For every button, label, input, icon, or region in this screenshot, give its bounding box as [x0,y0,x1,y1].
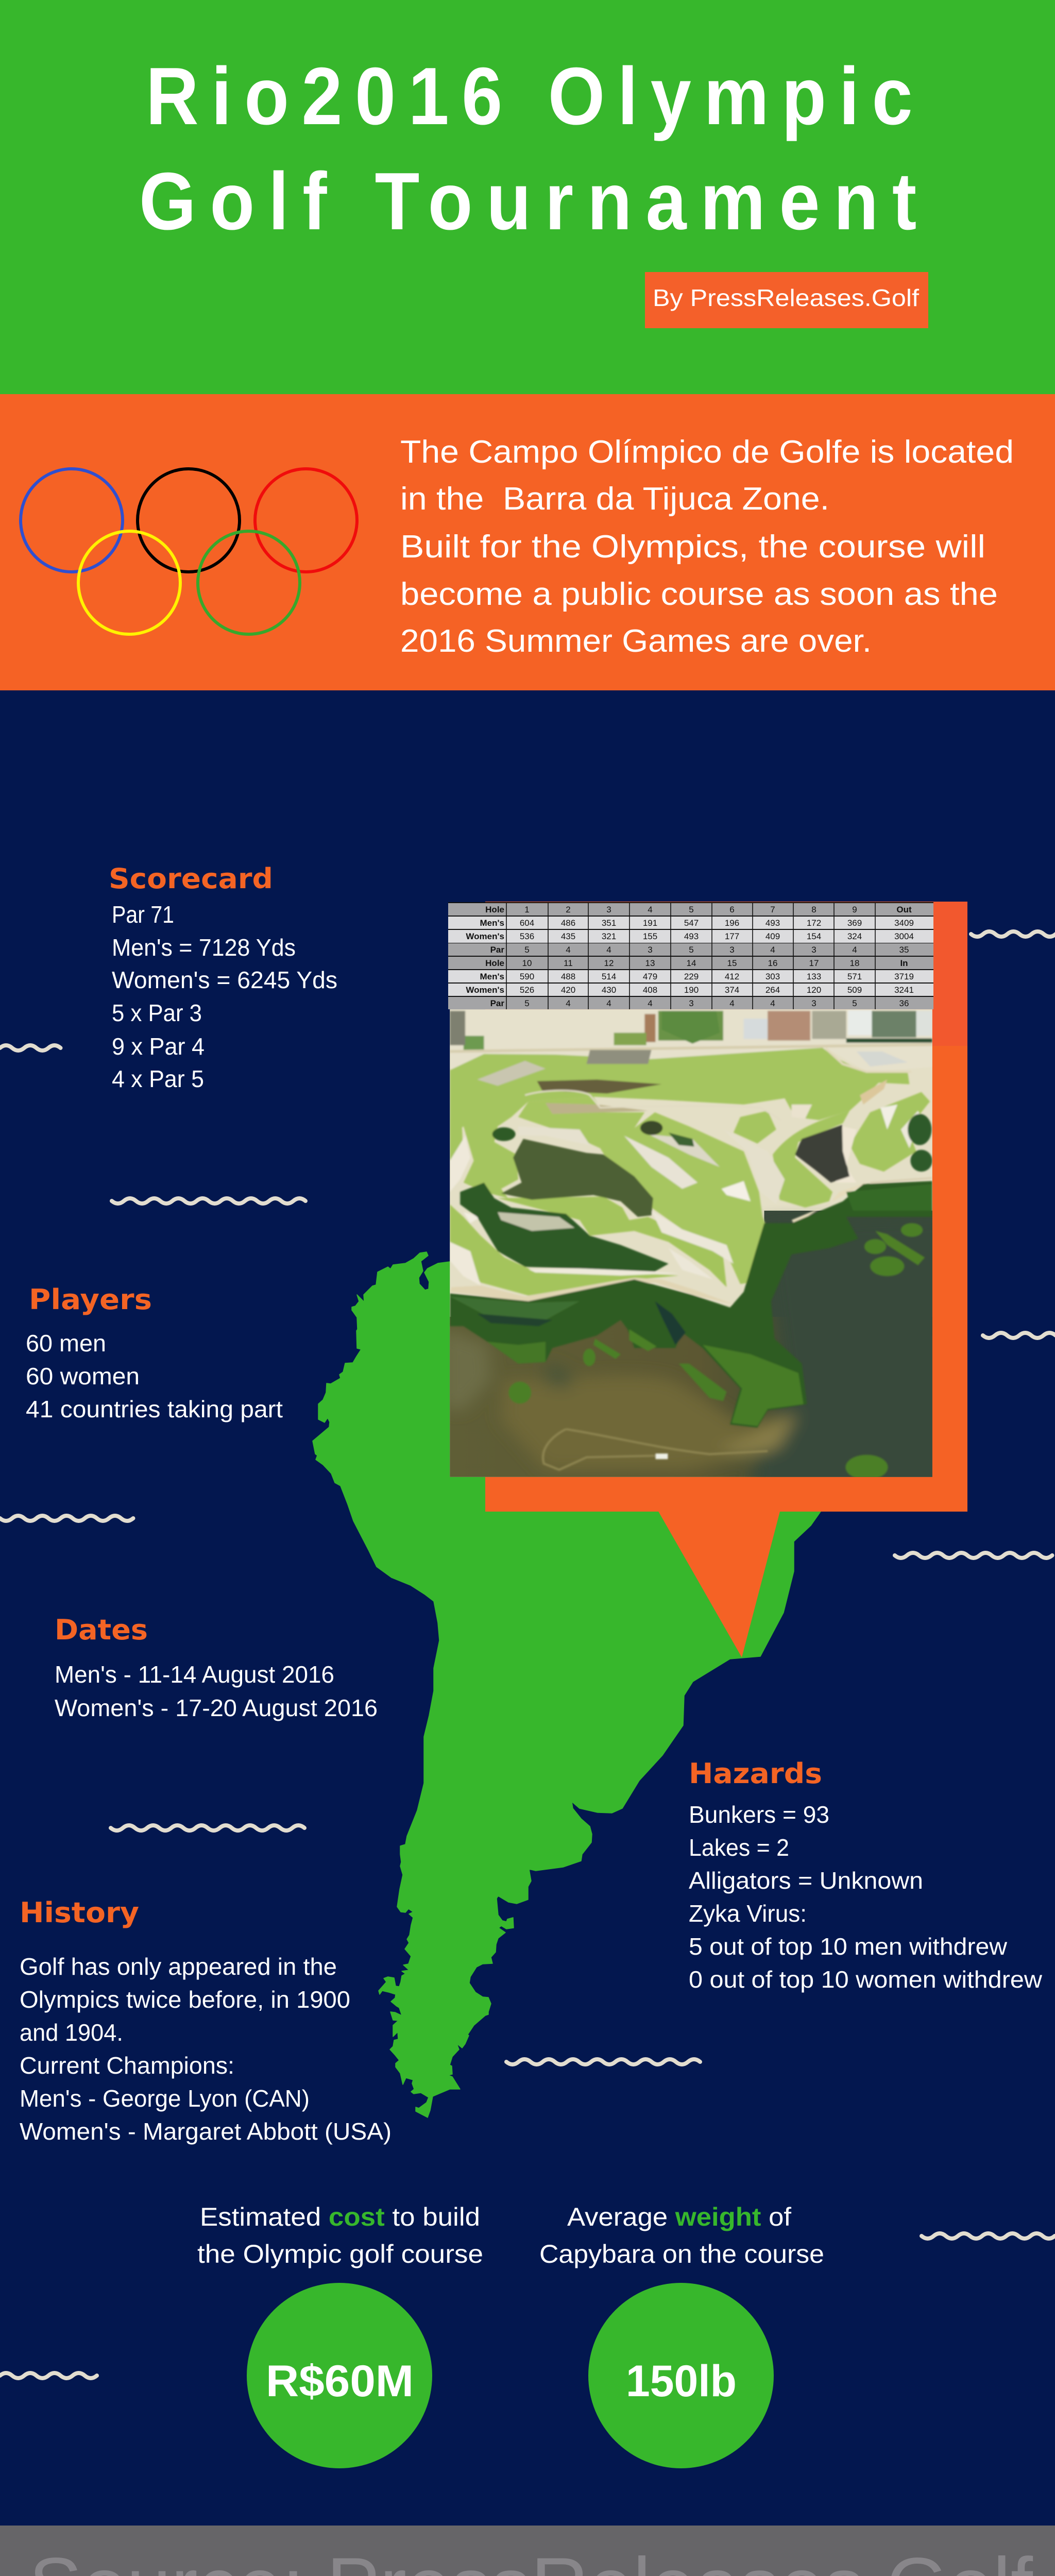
text block: hazards: 5 out of top 10 men withdrew [689,1933,1008,1960]
scorecard table: 526 [520,985,534,995]
scorecard table: 3004 [894,931,914,941]
scorecard table: 5 [524,998,530,1008]
scorecard table: In [900,958,908,968]
scorecard table: 155 [643,931,657,941]
byline badge: By PressReleases.Golf [653,284,919,311]
scorecard table: 190 [684,985,699,995]
text block: hazards: Zyka Virus: [689,1900,807,1927]
icon: olympic rings [21,469,357,634]
stat caption: cost: the Olympic golf course [197,2240,483,2268]
urban strip [450,1009,932,1072]
scorecard table: 3409 [894,918,914,928]
title: Rio2016 Olympic [146,50,913,142]
stat circle: 150lb [588,2283,774,2468]
scorecard table: 35 [899,945,909,955]
scorecard table: 5 [689,945,694,955]
text block: hazards [689,1757,1043,1993]
scorecard table: 4 [606,998,611,1008]
scorecard table: 229 [684,972,699,981]
map: South America [313,1252,824,2117]
text block: scorecard: Men's = 7128 Yds [112,934,296,961]
scorecard table: 571 [847,972,862,981]
intro text: become a public course as soon as the [400,577,998,612]
scorecard table: 4 [770,945,775,955]
scorecard table: 7 [770,905,775,914]
scorecard table: 430 [602,985,616,995]
heading: history: History [20,1896,139,1929]
text block: players: 60 women [26,1363,140,1389]
scorecard table: 17 [809,958,819,968]
text block: history: Men's - George Lyon (CAN) [20,2085,310,2112]
intro text: in the Barra da Tijuca Zone. [400,481,829,517]
text block: hazards: Alligators = Unknown [689,1867,923,1894]
stat circle: 150lb: 150lb [626,2357,737,2406]
scorecard table: 3 [811,945,816,955]
text block: scorecard: 9 x Par 4 [112,1033,205,1060]
scorecard table: Women's [466,985,504,995]
scorecard table: 120 [807,985,821,995]
scorecard table: 133 [807,972,821,981]
footer [0,2526,1055,2576]
scorecard table: 369 [847,918,862,928]
scorecard table: 264 [765,985,780,995]
scorecard table: 4 [770,998,775,1008]
scorecard table: 18 [850,958,859,968]
scorecard table: 4 [566,998,571,1008]
photo: aerial view of course [450,1009,932,1477]
scorecard table: 486 [561,918,575,928]
scorecard table: 4 [606,945,611,955]
scorecard table: 10 [522,958,532,968]
scorecard table: 191 [643,918,657,928]
scorecard table: 412 [725,972,739,981]
intro text: 2016 Summer Games are over. [400,623,872,659]
scorecard table: 15 [727,958,737,968]
scorecard table: 3 [648,945,653,955]
text block: scorecard [109,862,337,1092]
scorecard table: 3719 [894,972,914,981]
scorecard table: 493 [765,918,780,928]
stat: weight [539,2202,824,2468]
intro text: The Campo Olímpico de Golfe is located [400,434,1014,470]
scorecard table: 3 [811,998,816,1008]
scorecard table: 8 [811,905,816,914]
scorecard table: Par [490,945,504,955]
stat circle: R$60M: R$60M [266,2357,414,2406]
intro text: Built for the Olympics, the course will [400,529,985,565]
scorecard table: Out [896,905,912,914]
intro text [400,434,1014,659]
scorecard table: 3241 [894,985,914,995]
scorecard table: Men's [480,972,504,981]
wave decoration [971,931,1055,937]
scorecard table: 514 [602,972,616,981]
text block: players [26,1283,283,1422]
byline badge [645,272,928,328]
scorecard table: 374 [725,985,739,995]
scorecard table: 14 [687,958,696,968]
scorecard table: 4 [648,905,653,914]
text block: history: Women's - Margaret Abbott (USA) [20,2118,392,2145]
scorecard table: 36 [899,998,909,1008]
scorecard table: 435 [561,931,575,941]
text block: history: Golf has only appeared in the [20,1953,337,1980]
heading: players: Players [29,1283,152,1316]
scorecard table: Par [490,998,504,1008]
text block: players: 41 countries taking part [26,1396,283,1422]
scorecard table [448,902,933,1009]
stat caption: cost [197,2202,483,2268]
scorecard table: 4 [566,945,571,955]
scorecard table: 2 [566,905,571,914]
scorecard table: 408 [643,985,657,995]
scorecard table: 536 [520,931,534,941]
scorecard table: Women's [466,931,504,941]
stat caption: weight [539,2202,824,2268]
scorecard table: 509 [847,985,862,995]
scorecard table: 409 [765,931,780,941]
heading: scorecard: Scorecard [109,862,273,895]
text block: history: Olympics twice before, in 1900 [20,1986,350,2013]
stat caption: weight: Average weight of [567,2202,791,2231]
title: Golf Tournament [139,156,916,247]
scorecard table: 420 [561,985,575,995]
fairways [450,1048,909,1198]
trees [460,1182,669,1272]
scorecard table: 11 [564,958,573,968]
scorecard table: 16 [768,958,777,968]
scorecard table: 3 [729,945,735,955]
water base [450,1009,932,1477]
scorecard table: 13 [645,958,655,968]
heading: dates: Dates [55,1614,148,1646]
bunkers and rough [450,1136,470,1192]
lakes [501,1139,653,1217]
scorecard table: 590 [520,972,534,981]
paths [524,1088,770,1114]
scorecard table: 154 [807,931,821,941]
text block: dates [55,1614,378,1721]
scorecard table: Men's [480,918,504,928]
scorecard table: Hole [485,958,504,968]
header panel [0,0,1055,394]
text block: dates: Women's - 17-20 August 2016 [55,1694,378,1721]
wake and boat [543,1429,768,1470]
intro panel [0,394,1055,690]
text block: hazards: 0 out of top 10 women withdrew [689,1966,1043,1993]
scorecard table: 3 [606,905,611,914]
scorecard table: 4 [729,998,735,1008]
scorecard table: 488 [561,972,575,981]
scorecard table: 351 [602,918,616,928]
scorecard table: 196 [725,918,739,928]
scorecard table: 172 [807,918,821,928]
scorecard table: Hole [485,905,504,914]
scorecard table: 493 [684,931,699,941]
scorecard table: 177 [725,931,739,941]
scorecard table: 547 [684,918,699,928]
scorecard table: 324 [847,931,862,941]
scorecard table: 1 [524,905,530,914]
text block: hazards: Lakes = 2 [689,1834,789,1861]
scorecard table: 5 [852,998,857,1008]
stat circle: R$60M [247,2283,432,2468]
heading: hazards: Hazards [689,1757,822,1790]
text block: scorecard: 4 x Par 5 [112,1065,204,1092]
text block: players: 60 men [26,1330,106,1357]
text block: history: and 1904. [20,2019,123,2046]
scorecard table: 4 [852,945,857,955]
scorecard table: 6 [729,905,735,914]
scorecard table: 321 [602,931,616,941]
scorecard table: 5 [689,905,694,914]
text block: hazards: Bunkers = 93 [689,1801,829,1828]
text block: dates: Men's - 11-14 August 2016 [55,1661,334,1688]
scorecard table: 9 [852,905,857,914]
scorecard table: 4 [648,998,653,1008]
stat caption: cost: Estimated cost to build [200,2202,480,2231]
scorecard table: 5 [524,945,530,955]
text block: scorecard: 5 x Par 3 [112,999,202,1026]
text block: scorecard: Par 71 [112,901,174,928]
scorecard table: 479 [643,972,657,981]
title [139,50,916,247]
text block: scorecard: Women's = 6245 Yds [112,967,337,993]
text block: history: Current Champions: [20,2052,234,2079]
scorecard table: 303 [765,972,780,981]
scorecard table: 12 [604,958,614,968]
scorecard table: 3 [689,998,694,1008]
stat caption: weight: Capybara on the course [539,2240,824,2268]
callout panel with pointer [485,902,967,1657]
text block: history [20,1896,392,2145]
stat: cost [197,2202,483,2468]
scorecard table: 604 [520,918,534,928]
